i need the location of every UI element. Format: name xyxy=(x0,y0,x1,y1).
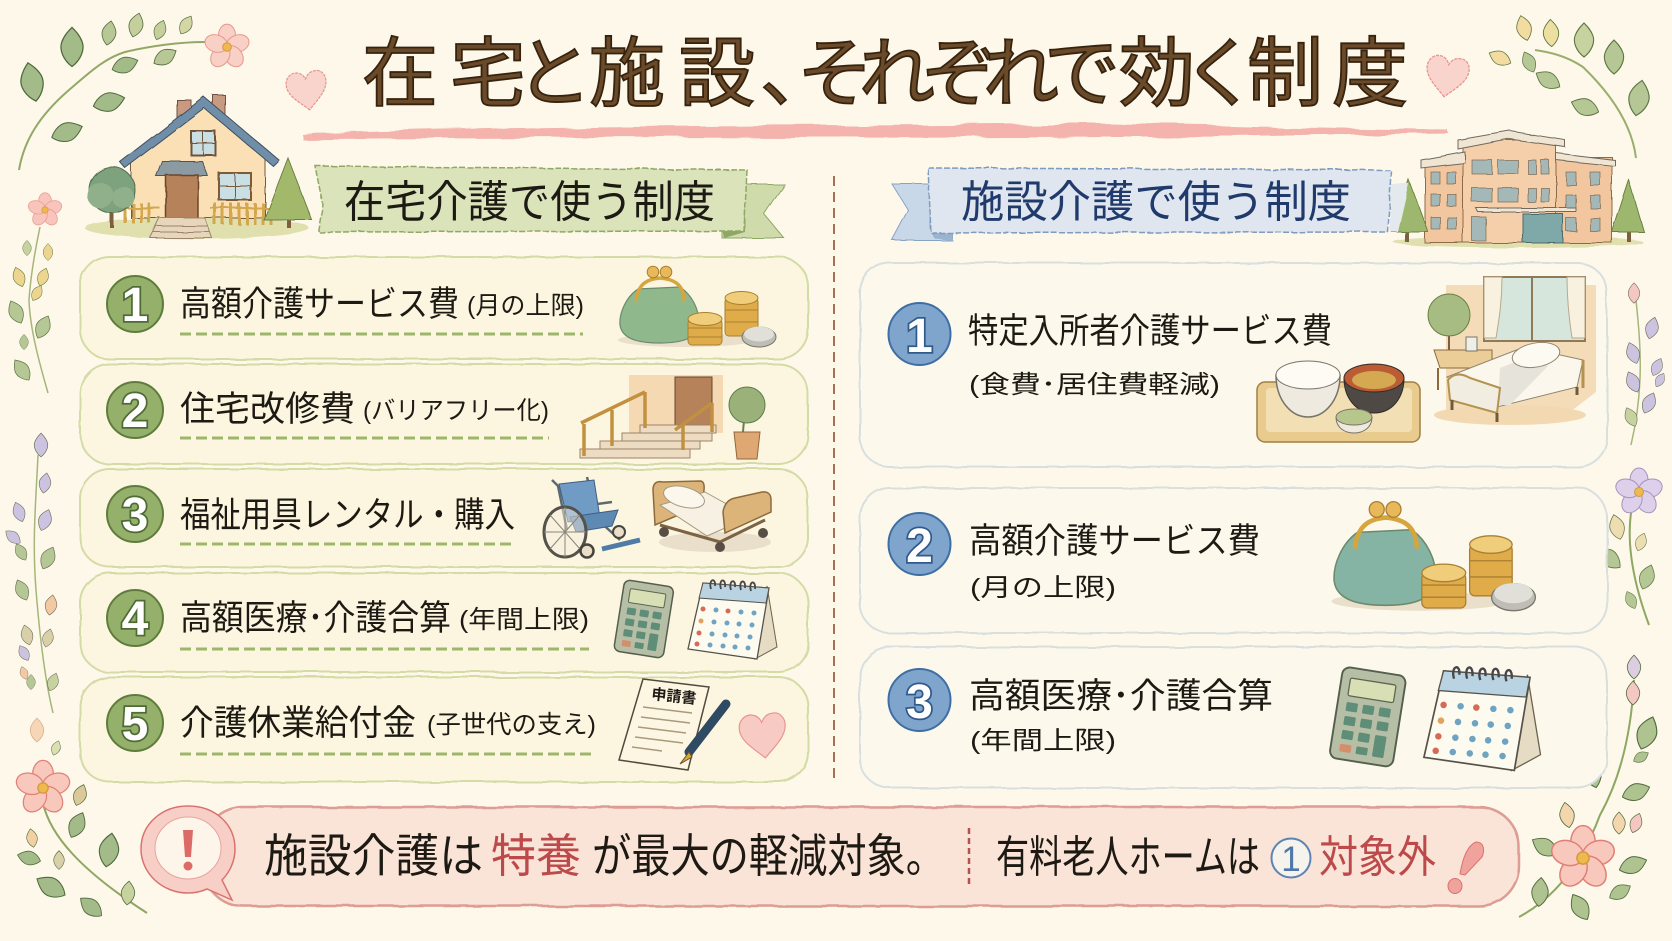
callout text: paid homes: 対象外 xyxy=(1319,833,1436,882)
label: specified resident care xyxy=(968,312,1332,399)
badge 2: 2 xyxy=(122,385,148,438)
badge 2: 2 xyxy=(906,520,933,573)
icon: calculator xyxy=(1329,666,1407,767)
label: combined medical and care: 高額医療･介護合算 xyxy=(969,677,1273,716)
callout text: paid homes: 有料老人ホームは xyxy=(996,833,1260,882)
callout text: paid homes xyxy=(996,833,1484,894)
icon: facility building xyxy=(1392,131,1644,248)
icon: application form and pen xyxy=(619,679,726,770)
panel: home care card 1 xyxy=(80,257,808,359)
badge 1 xyxy=(107,276,163,332)
icon: heart xyxy=(738,711,788,760)
ribbon: home care heading xyxy=(315,166,784,238)
label: combined medical and care: 高額医療･介護合算 xyxy=(180,599,451,638)
badge 2 xyxy=(888,513,950,575)
panel: home care card 3 xyxy=(80,469,808,567)
ribbon title: facility care: 施設介護で使う制度 xyxy=(961,178,1351,227)
icon: alert speech bubble xyxy=(141,806,235,900)
panel: facility card 1 xyxy=(860,263,1607,467)
badge 5: 5 xyxy=(122,698,148,751)
decoration: bottom-left flowers xyxy=(14,718,147,922)
icon: house xyxy=(85,95,312,239)
label: care leave benefit: (子世代の支え) xyxy=(427,711,596,739)
label: home renovation xyxy=(180,390,549,429)
icon: right heart xyxy=(1423,54,1471,100)
decoration: top-left branch xyxy=(17,11,251,170)
label: combined medical and care: (年間上限) xyxy=(459,606,589,634)
panel: home care card 2 xyxy=(80,364,808,464)
label: specified resident care: (食費･居住費軽減) xyxy=(969,371,1220,399)
badge 1: 1 xyxy=(122,279,148,332)
icon: meal tray xyxy=(1257,361,1420,442)
label: high-cost care: 高額介護サービス費 xyxy=(180,285,459,324)
badge 2 xyxy=(107,382,163,438)
title: 在宅と施設、それぞれで効く制度 xyxy=(362,32,1408,117)
label: home renovation: (バリアフリー化) xyxy=(363,397,549,425)
panel: facility card 3 xyxy=(860,647,1607,788)
badge 3 xyxy=(888,669,950,731)
callout text: facility care: が最大の軽減対象。 xyxy=(592,830,945,882)
label: high-cost care: (月の上限) xyxy=(970,574,1116,602)
badge 1: 1 xyxy=(906,310,933,363)
callout text: paid homes: 1 xyxy=(1281,840,1301,879)
badge 5 xyxy=(107,695,163,751)
icon: teal purse and coins xyxy=(1332,502,1535,611)
badge 3 xyxy=(107,486,163,542)
icon: bedroom xyxy=(1428,277,1596,425)
badge 4: 4 xyxy=(122,593,149,646)
label: care leave benefit xyxy=(180,704,596,743)
label: welfare equipment: 福祉用具レンタル・購入 xyxy=(180,496,515,535)
label: specified resident care: 特定入所者介護サービス費 xyxy=(968,312,1332,351)
badge 3: 3 xyxy=(122,489,148,542)
callout text: facility care: 施設介護は xyxy=(264,830,483,882)
panel: home care card 5 xyxy=(80,677,808,782)
badge 1 xyxy=(888,303,950,365)
label: high-cost care: (月の上限) xyxy=(467,292,584,320)
ribbon: facility care heading xyxy=(892,168,1409,240)
label: combined medical and care xyxy=(969,677,1273,755)
icon: application form and pen: 申請書 xyxy=(651,685,697,708)
icon: calendar xyxy=(688,580,777,659)
decoration: right lower sprig xyxy=(1593,468,1665,625)
title underline brush xyxy=(302,124,1448,139)
decoration: top-right branch xyxy=(1486,14,1652,158)
decoration: right middle sprig xyxy=(1621,283,1668,445)
decoration: left lower sprig xyxy=(2,433,61,713)
label: combined medical and care: (年間上限) xyxy=(970,727,1116,755)
label: home renovation: 住宅改修費 xyxy=(180,390,355,429)
label: care leave benefit: 介護休業給付金 xyxy=(180,704,416,743)
icon: care bed xyxy=(653,481,771,552)
icon: left heart xyxy=(285,69,330,113)
icon: stairs and plant xyxy=(580,375,765,459)
badge 3: 3 xyxy=(906,676,933,729)
callout text: facility care: 特養 xyxy=(491,830,581,882)
panel: facility card 2 xyxy=(860,488,1607,633)
icon: wheelchair xyxy=(544,477,640,558)
decoration: left middle sprig xyxy=(5,193,63,393)
decoration: bottom-right flowers xyxy=(1519,655,1662,924)
vertical divider xyxy=(833,176,835,783)
callout bar xyxy=(141,806,1519,906)
callout text: facility care xyxy=(264,830,945,882)
badge 4 xyxy=(107,590,163,646)
panel: home care card 4 xyxy=(80,573,808,672)
icon: calculator xyxy=(614,580,674,658)
icon: purse and coins xyxy=(618,266,776,347)
icon: calendar xyxy=(1424,667,1541,770)
ribbon title: home care: 在宅介護で使う制度 xyxy=(344,178,715,227)
label: high-cost care xyxy=(969,522,1260,602)
label: high-cost care: 高額介護サービス費 xyxy=(969,522,1260,561)
